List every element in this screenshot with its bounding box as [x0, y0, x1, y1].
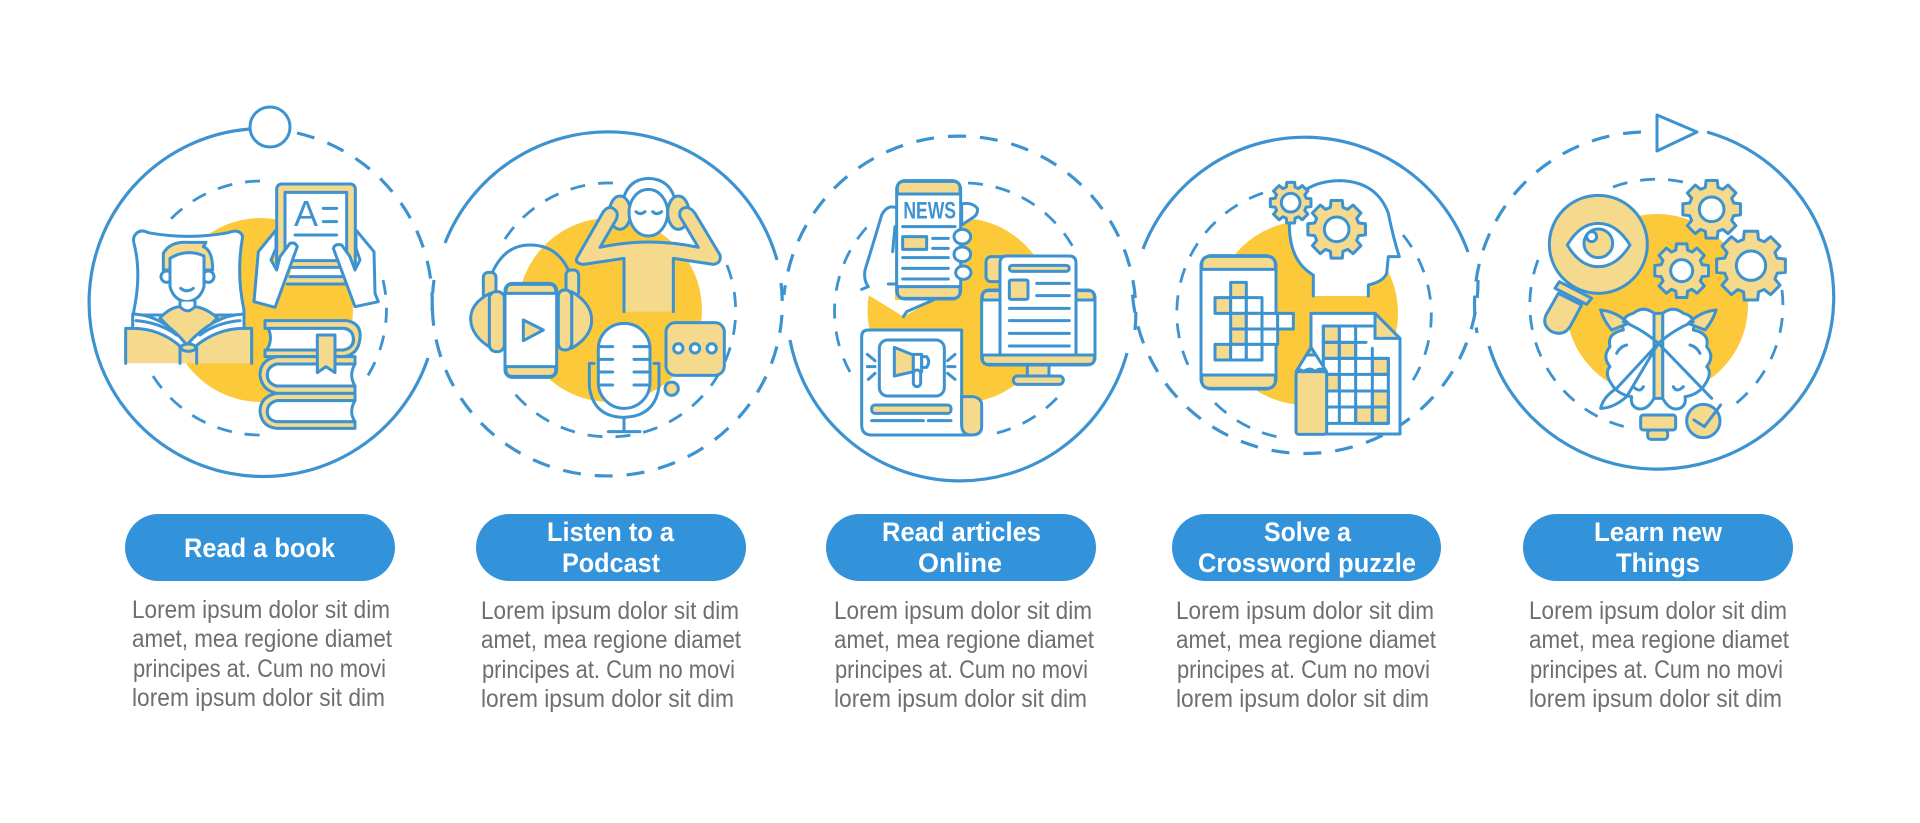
label pill 1 [125, 514, 395, 581]
inner dashed ring 1 [153, 181, 386, 435]
label pill 2: Podcast [562, 548, 660, 578]
yellow disc 1 [169, 218, 353, 402]
icon: crossword puzzle, head with gears [1201, 181, 1400, 434]
label pill 3: Online [918, 548, 1002, 578]
inner dashed ring 3 [835, 183, 1073, 433]
start marker circle [250, 107, 290, 147]
text block 2: amet, mea regione diamet [481, 626, 741, 654]
yellow disc 4 [1214, 221, 1398, 405]
inner dashed ring 4 [1177, 193, 1431, 437]
end marker triangle [1657, 115, 1697, 151]
label pill 5: Learn new [1594, 517, 1723, 547]
icon: magnifier with eye, gears, brain bulb [1545, 181, 1785, 439]
text block 3: amet, mea regione diamet [834, 626, 1094, 654]
icon: news phone, monitor, flyer: NEWS [903, 197, 956, 224]
yellow disc 2 [518, 218, 702, 402]
yellow disc 5 [1566, 214, 1748, 396]
panel: step 4 solve a crossword puzzle [1132, 137, 1478, 454]
text block 2: principes at. Cum no movi [482, 656, 735, 684]
text block 3: Lorem ipsum dolor sit dim [834, 597, 1092, 625]
panel: step 3 read articles online [784, 136, 1136, 481]
text block 2: lorem ipsum dolor sit dim [481, 685, 734, 713]
panel: step 1 read a book [89, 107, 432, 477]
text block 3 [834, 597, 1094, 713]
text block 2: Lorem ipsum dolor sit dim [481, 597, 739, 625]
label pill 4: Solve a [1264, 517, 1352, 547]
label pill 5: Things [1616, 548, 1700, 578]
icon: news phone, monitor, flyer [862, 181, 1095, 435]
outer ring 4 [1132, 137, 1478, 454]
outer ring 1 [89, 129, 432, 477]
text block 1: Lorem ipsum dolor sit dim [132, 596, 390, 624]
label pill 2: Listen to a [547, 517, 675, 547]
label pill 4: Crossword puzzle [1198, 548, 1416, 578]
icon: listener, headphones, microphone [471, 178, 724, 432]
label pill 3 [826, 514, 1096, 581]
text block 3: principes at. Cum no movi [835, 656, 1088, 684]
text block 4 [1176, 597, 1436, 713]
outer ring 5 [1475, 132, 1834, 469]
text block 1: lorem ipsum dolor sit dim [132, 684, 385, 712]
outer ring 3 [784, 136, 1136, 481]
text block 5: lorem ipsum dolor sit dim [1529, 685, 1782, 713]
text block 1: principes at. Cum no movi [133, 655, 386, 683]
label pill 2 [476, 514, 746, 581]
text block 4: lorem ipsum dolor sit dim [1176, 685, 1429, 713]
panel: step 5 learn new things [1475, 115, 1834, 469]
text block 2 [481, 597, 741, 713]
inner dashed ring 5 [1530, 179, 1783, 428]
text block 5 [1529, 597, 1789, 713]
text block 5: principes at. Cum no movi [1530, 656, 1783, 684]
label pill 1: Read a book [184, 533, 336, 563]
icon: person reading in bed [125, 184, 378, 428]
text block 4: Lorem ipsum dolor sit dim [1176, 597, 1434, 625]
text block 1 [132, 596, 392, 712]
panel: step 2 listen to a podcast [432, 132, 782, 476]
label pill 4 [1172, 514, 1441, 581]
yellow disc 3 [868, 218, 1052, 403]
text block 5: amet, mea regione diamet [1529, 626, 1789, 654]
outer ring 2 [432, 132, 782, 476]
label pill 5 [1523, 514, 1793, 581]
text block 5: Lorem ipsum dolor sit dim [1529, 597, 1787, 625]
text block 4: amet, mea regione diamet [1176, 626, 1436, 654]
text block 1: amet, mea regione diamet [132, 625, 392, 653]
text block 3: lorem ipsum dolor sit dim [834, 685, 1087, 713]
text block 4: principes at. Cum no movi [1177, 656, 1430, 684]
icon: person reading in bed: A [294, 193, 318, 234]
inner dashed ring 2 [503, 183, 736, 437]
label pill 3: Read articles [882, 517, 1041, 547]
